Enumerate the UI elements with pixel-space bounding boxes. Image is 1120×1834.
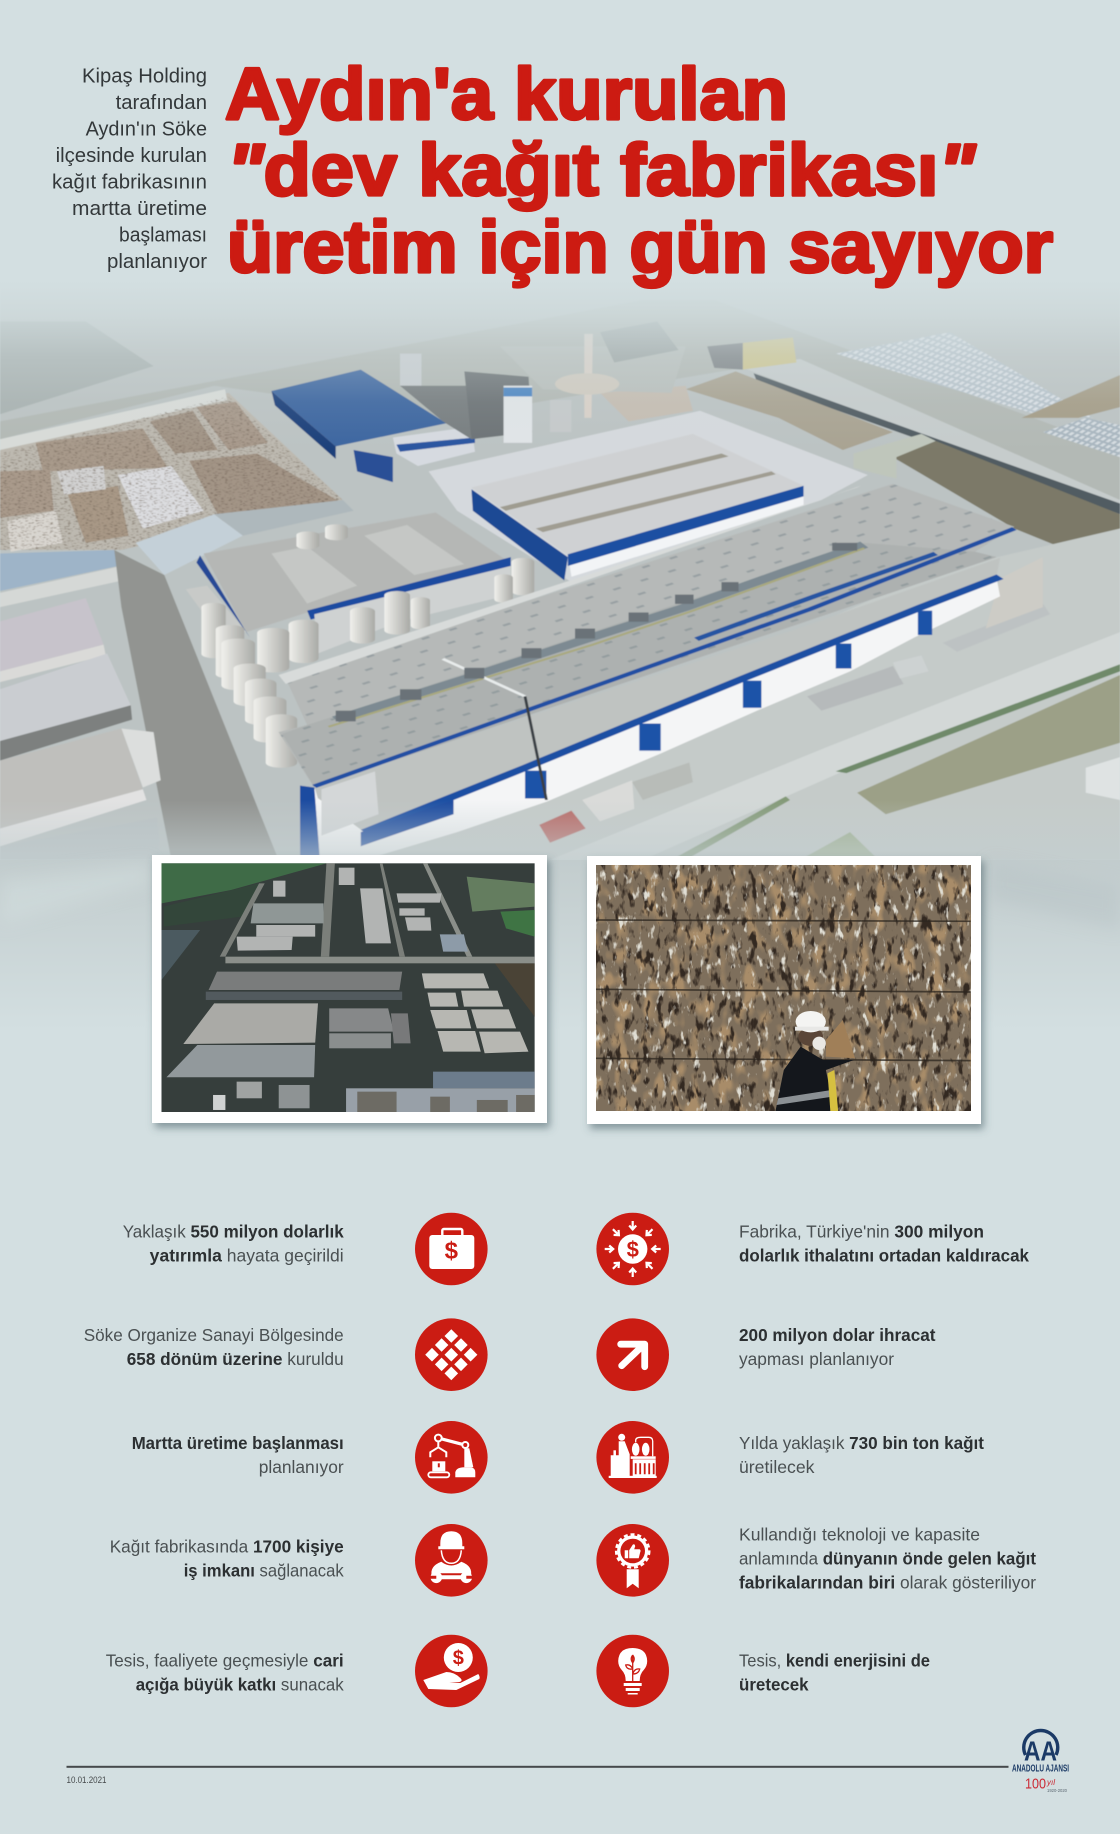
icon: factory	[596, 1421, 669, 1494]
icon: briefcase with dollar: $	[445, 1238, 459, 1264]
intro text: Kipaş Holding	[82, 66, 207, 88]
text: imports: dolarlık ithalatını ortadan kaldıracak	[739, 1246, 1029, 1266]
fact: exports	[596, 1318, 936, 1391]
icon: dollar with inward arrows: $	[627, 1237, 639, 1262]
text: current account: açığa büyük katkı sunacak	[136, 1675, 344, 1695]
text: own energy: Tesis, kendi enerjisini de	[739, 1651, 930, 1671]
intro text: martta üretime	[72, 198, 207, 220]
photo frame: worker in front of paper bales	[587, 856, 981, 1124]
text: investment: yatırımla hayata geçirildi	[150, 1246, 344, 1266]
icon: up-right arrow	[596, 1318, 669, 1391]
logo: Anadolu Ajansı 100 yıl	[1012, 1730, 1069, 1793]
fact: capacity	[596, 1421, 984, 1494]
text: world leading technology	[739, 1525, 1036, 1592]
icon: hand holding coin: $	[453, 1648, 464, 1670]
text: start of production	[132, 1433, 344, 1477]
intro text: planlanıyor	[107, 251, 207, 273]
title: Aydın'a kurulan	[225, 54, 788, 135]
text: world leading technology: anlamında dünyanın önde gelen kağıt	[739, 1549, 1036, 1569]
text: employment: iş imkanı sağlanacak	[184, 1561, 344, 1581]
text: area: 658 dönüm üzerine kuruldu	[127, 1349, 344, 1369]
text: capacity: Yılda yaklaşık 730 bin ton kağıt	[739, 1433, 984, 1453]
footer rule	[66, 1766, 1008, 1768]
text: own energy: üretecek	[739, 1675, 809, 1695]
text: start of production: Martta üretime başlanması	[132, 1433, 344, 1453]
fact: current account	[106, 1635, 488, 1707]
date: 10.01.2021	[66, 1775, 106, 1786]
logo: Anadolu Ajansı 100 yıl: 1920-2020	[1047, 1788, 1067, 1793]
icon: land plots	[415, 1318, 488, 1391]
fact: own energy	[596, 1635, 930, 1707]
fact: area	[84, 1318, 488, 1391]
text: current account: Tesis, faaliyete geçmesiyle cari	[106, 1651, 344, 1671]
intro text: Aydın'ın Söke	[86, 118, 207, 140]
text: investment	[123, 1222, 344, 1266]
intro text: kağıt fabrikasının	[52, 172, 207, 194]
panel: left facts	[84, 1213, 488, 1707]
fact: employment	[110, 1524, 488, 1597]
text: current account	[106, 1651, 344, 1695]
fog over top of aerial photo	[0, 280, 1120, 450]
logo: Anadolu Ajansı 100 yıl: ANADOLU AJANSI	[1012, 1764, 1069, 1774]
intro text: ilçesinde kurulan	[56, 145, 207, 167]
text: investment: Yaklaşık 550 milyon dolarlık	[123, 1222, 344, 1242]
text: imports	[739, 1222, 1029, 1266]
text: capacity	[739, 1433, 984, 1477]
icon: worker with wrench	[415, 1524, 488, 1597]
logo: Anadolu Ajansı 100 yıl: 100	[1025, 1776, 1046, 1792]
title	[225, 54, 1053, 288]
title: "dev kağıt fabrikası "	[227, 130, 976, 211]
text: world leading technology: fabrikalarından biri olarak gösteriliyor	[739, 1572, 1036, 1592]
text: employment: Kağıt fabrikasında 1700 kişiye	[110, 1537, 344, 1557]
text: world leading technology: Kullandığı teknoloji ve kapasite	[739, 1525, 980, 1545]
logo: Anadolu Ajansı 100 yıl: AA	[1024, 1736, 1057, 1767]
icon: briefcase with dollar	[415, 1213, 488, 1285]
icon: rosette with thumb up	[596, 1524, 669, 1597]
aerial photo fade below	[0, 860, 1120, 1030]
text: area: Söke Organize Sanayi Bölgesinde	[84, 1325, 344, 1345]
intro text: başlaması	[119, 224, 207, 246]
icon: dollar with inward arrows	[596, 1213, 669, 1285]
text: own energy	[739, 1651, 930, 1695]
icon: robot arm	[415, 1421, 488, 1494]
title: üretim için gün sayıyor	[227, 207, 1053, 288]
text: exports: yapması planlanıyor	[739, 1349, 894, 1369]
text: area	[84, 1325, 344, 1369]
text: imports: Fabrika, Türkiye'nin 300 milyon	[739, 1222, 984, 1242]
text: capacity: üretilecek	[739, 1457, 815, 1477]
fact: world leading technology	[596, 1524, 1036, 1597]
fact: investment	[123, 1213, 488, 1285]
fog over bottom of aerial photo	[0, 800, 1120, 861]
text: exports	[739, 1325, 936, 1369]
text: employment	[110, 1537, 344, 1581]
photo frame: factory from above	[152, 855, 547, 1123]
text: exports: 200 milyon dolar ihracat	[739, 1325, 936, 1345]
panel: right facts	[596, 1213, 1036, 1707]
logo: Anadolu Ajansı 100 yıl: yıl	[1046, 1778, 1055, 1787]
aerial photo of paper factory	[0, 280, 1120, 861]
fact: start of production	[132, 1421, 488, 1494]
intro text	[52, 66, 207, 273]
text: start of production: planlanıyor	[259, 1457, 344, 1477]
icon: light bulb with plant	[596, 1635, 669, 1707]
fact: imports	[596, 1213, 1029, 1285]
intro text: tarafından	[116, 92, 207, 114]
icon: hand holding coin	[415, 1635, 488, 1707]
